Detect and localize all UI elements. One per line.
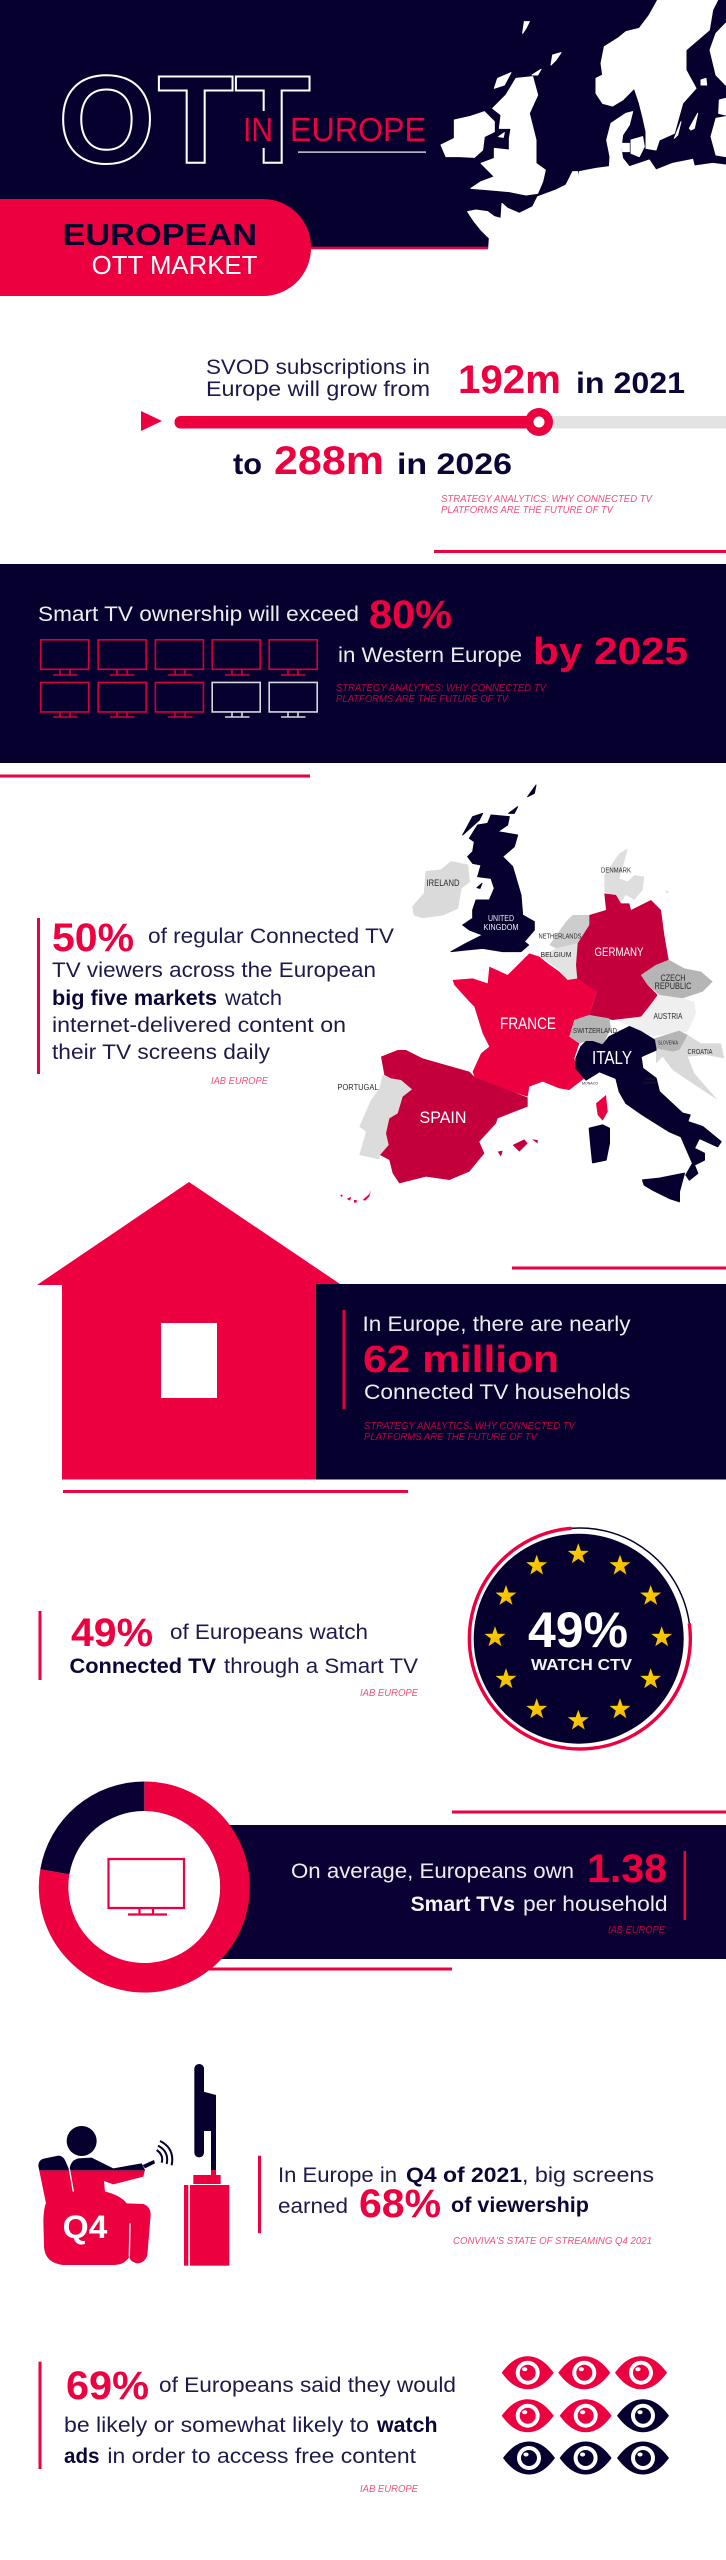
number: 69%: 69% <box>66 2364 149 2408</box>
labels: country names: SWITZERLAND <box>573 1026 617 1035</box>
map: Belgium <box>539 943 578 981</box>
stat: Q4 2021 viewership <box>258 2156 654 2247</box>
icon: house <box>37 1182 340 1480</box>
map: France <box>453 953 597 1097</box>
text: Connected TV households: Connected TV households <box>364 1381 630 1404</box>
text: On average: On average, Europeans own <box>291 1860 574 1883</box>
section tab: European OTT market: OTT MARKET <box>92 252 257 280</box>
map: Ireland <box>413 862 469 918</box>
text: Smart TVs per household: per household <box>523 1893 668 1916</box>
text: of Europeans watch: of Europeans watch <box>170 1621 368 1644</box>
title: in Europe: EUROPE <box>290 111 426 148</box>
labels: country names: BELGIUM <box>540 950 572 959</box>
text: watch ads description: watch <box>376 2414 438 2437</box>
text: watch ads description <box>64 2374 456 2468</box>
icons: nine eyes <box>502 2356 669 2474</box>
stat panel: 62 million households <box>37 1182 726 1480</box>
map: Italy <box>576 1027 721 1202</box>
labels: country names: SAN <box>645 1077 656 1081</box>
title: OTT: O <box>58 51 155 190</box>
labels: country names: MONACO <box>582 1080 598 1086</box>
labels: country names: KINGDOM <box>484 923 519 932</box>
panel: Smart TV ownership <box>0 564 726 763</box>
timeline progress bar <box>141 408 726 436</box>
number: 62 million: 62 million <box>363 1339 559 1381</box>
map: Switzerland <box>569 1015 611 1045</box>
icon: person watching TV with remote <box>38 2064 229 2266</box>
number: 49%: 49% <box>528 1602 628 1658</box>
source: Strategy Analytics: PLATFORMS ARE THE FUTURE OF TV <box>441 504 614 516</box>
text: of Europeans watch <box>70 1621 418 1678</box>
map: Croatia <box>656 1035 724 1100</box>
map: northern Europe silhouette <box>441 0 726 260</box>
text: watch ads description: in order to access free content <box>107 2445 416 2468</box>
text: In Europe in Q4 of 2021: Q4 of 2021 <box>406 2164 522 2187</box>
source: IAB Europe: IAB EUROPE <box>360 2483 419 2495</box>
source: IAB Europe: IAB EUROPE <box>360 1687 419 1699</box>
stat: 69% watch ads <box>38 2362 456 2495</box>
source: Strategy Analytics: PLATFORMS ARE THE FUTURE OF TV <box>336 693 509 705</box>
stat panel: 1.38 Smart TVs per household <box>39 1782 726 1993</box>
text: big five description <box>52 925 394 1064</box>
labels: country names: UNITED <box>488 914 514 923</box>
stat: SVOD subscriptions <box>141 356 726 516</box>
icon: TV <box>108 1859 184 1914</box>
number: 192m in 2021: in 2021 <box>576 367 685 400</box>
source: Strategy Analytics: STRATEGY ANALYTICS: WHY CONNECTED TV <box>441 493 653 505</box>
number: 1.38: 1.38 <box>587 1847 667 1891</box>
icons: twelve stars <box>485 1543 672 1730</box>
labels: country names: CROATIA <box>688 1047 712 1056</box>
text: watch ads description: be likely or somewhat likely to <box>64 2414 369 2437</box>
number: to 288m in 2026: to <box>233 448 262 481</box>
map: Netherlands <box>549 915 591 948</box>
labels: country names <box>338 868 712 1127</box>
text: big five description: their TV screens daily <box>52 1041 271 1064</box>
text: In Europe in Q4 of 2021 <box>278 2164 654 2218</box>
map: western Europe by country <box>338 785 724 1203</box>
source: Strategy Analytics <box>364 1420 576 1443</box>
source: Strategy Analytics: STRATEGY ANALYTICS: WHY CONNECTED TV <box>364 1420 576 1432</box>
chart: donut <box>39 1782 250 1993</box>
text: big five description: TV viewers across the European <box>52 959 376 982</box>
source: Strategy Analytics <box>336 682 547 705</box>
source: IAB Europe: IAB EUROPE <box>608 1924 666 1936</box>
text: big five description: watch <box>224 987 282 1010</box>
source: Strategy Analytics: STRATEGY ANALYTICS: WHY CONNECTED TV <box>336 682 547 694</box>
map: Slovenia <box>654 1031 688 1052</box>
labels: country names: MARINO <box>644 1081 657 1085</box>
number: to 288m in 2026: 288m <box>274 439 384 483</box>
text: in Western Europe by 2025: in Western Europe <box>338 644 522 667</box>
number: to 288m in 2026: in 2026 <box>397 448 512 481</box>
text: In Europe: In Europe, there are nearly <box>362 1313 631 1336</box>
text: Smart TVs per household <box>411 1893 668 1916</box>
map: Germany <box>576 893 669 1020</box>
stat: 50% big five markets <box>37 916 394 1087</box>
badge: 49% watch CTV with EU stars <box>469 1528 690 1749</box>
labels: country names: AUSTRIA <box>654 1012 683 1021</box>
text: big five description: big five markets <box>52 987 217 1010</box>
map: Czech Republic <box>641 960 713 998</box>
title: OTT: T <box>158 51 234 190</box>
source: Strategy Analytics <box>441 493 653 516</box>
text: SVOD intro: SVOD subscriptions in <box>206 356 430 379</box>
section tab: European OTT market <box>0 199 311 296</box>
text: Smart TV ownership: Smart TV ownership will exceed <box>38 603 359 626</box>
title: in Europe: IN <box>243 111 273 148</box>
number: 68%: 68% <box>359 2182 441 2226</box>
number: 80%: 80% <box>369 593 452 637</box>
text: watch ads description: of Europeans said they would <box>159 2374 456 2397</box>
text: in Western Europe by 2025 <box>338 631 688 673</box>
map: Spain <box>380 1050 528 1183</box>
labels: country names: IRELAND <box>426 878 460 888</box>
text: big five description: internet-delivered content on <box>52 1014 346 1037</box>
text: of Europeans watch: Connected TV <box>70 1655 216 1678</box>
text: of viewership: of viewership <box>451 2194 589 2217</box>
labels: country names: PORTUGAL <box>338 1083 379 1092</box>
labels: country names: GERMANY <box>594 947 644 959</box>
map: United Kingdom <box>451 785 536 952</box>
text: of Europeans watch: through a Smart TV <box>224 1655 418 1678</box>
number: 49%: 49% <box>71 1611 153 1655</box>
source: IAB Europe: IAB EUROPE <box>211 1075 269 1087</box>
text: Smart TVs per household: Smart TVs <box>411 1893 515 1916</box>
labels: country names: FRANCE <box>500 1014 556 1033</box>
source: Conviva: CONVIVA'S STATE OF STREAMING Q4 2021 <box>453 2235 652 2247</box>
stat: 49% watch Connected TV <box>38 1611 419 1699</box>
section tab: European OTT market: EUROPEAN <box>62 217 257 252</box>
label: watch CTV: WATCH CTV <box>531 1657 632 1674</box>
text: big five description: of regular Connected TV <box>148 925 394 948</box>
text: In Europe in Q4 of 2021: In Europe in <box>278 2164 397 2187</box>
text: In Europe in Q4 of 2021: earned <box>278 2195 348 2218</box>
text: in Western Europe by 2025: by 2025 <box>533 631 688 673</box>
panel: navy box <box>316 1284 726 1480</box>
labels: country names: SPAIN <box>420 1108 466 1127</box>
number: 50%: 50% <box>52 916 134 960</box>
map: Denmark <box>604 848 669 902</box>
icons: ten TV sets <box>41 640 317 717</box>
header banner <box>0 0 726 296</box>
map: Austria <box>609 995 696 1036</box>
text: SVOD intro <box>206 356 430 401</box>
title: in Europe <box>243 111 426 153</box>
labels: country names: SLOVENIA <box>658 1040 679 1046</box>
number: to 288m in 2026 <box>233 439 512 483</box>
number: 192m in 2021: 192m <box>458 358 561 402</box>
label: Q4: Q4 <box>63 2209 108 2245</box>
labels: country names: NETHERLANDS <box>538 934 582 940</box>
map: Portugal <box>359 1075 412 1159</box>
map: Balearic and Canary islands <box>498 1139 538 1157</box>
text: In Europe in Q4 of 2021: , big screens <box>522 2164 654 2187</box>
text: SVOD intro: Europe will grow from <box>206 378 430 401</box>
number: 192m in 2021 <box>458 358 685 402</box>
labels: country names: CZECH <box>660 973 686 983</box>
labels: country names: REPUBLIC <box>654 981 692 991</box>
panel: navy box <box>210 1825 726 1959</box>
source: Strategy Analytics: PLATFORMS ARE THE FUTURE OF TV <box>364 1431 538 1443</box>
text: watch ads description: ads <box>64 2445 100 2468</box>
title: OTT: T <box>234 51 311 190</box>
labels: country names: DENMARK <box>601 868 631 874</box>
map: Corsica <box>596 1095 608 1121</box>
labels: country names: ITALY <box>592 1048 632 1068</box>
